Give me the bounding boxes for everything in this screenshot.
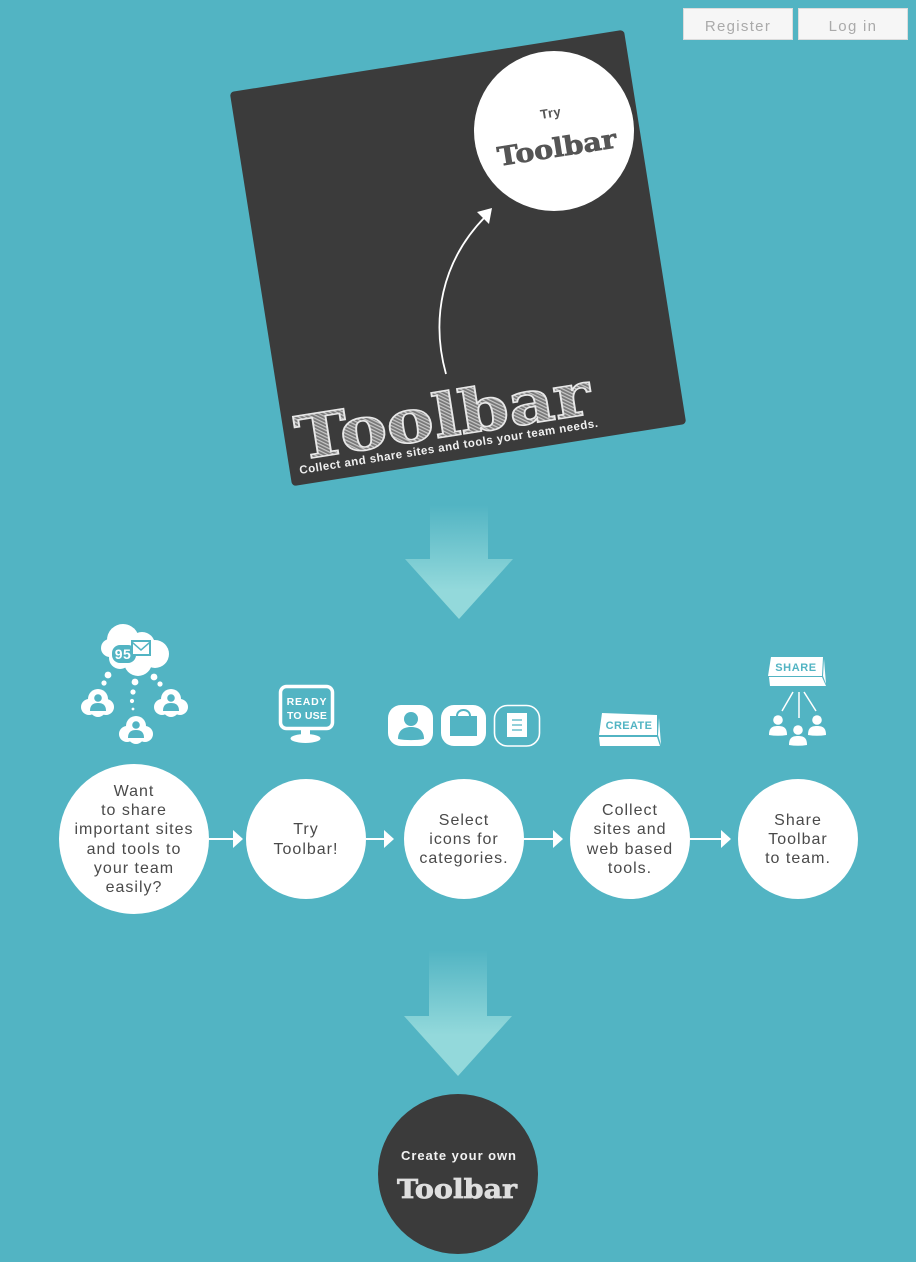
- button: log in: Log in: [829, 18, 877, 35]
- step 1 circle: your team: [94, 860, 174, 877]
- arrow: step 3 to 4: [524, 830, 563, 848]
- step 4 circle: sites and: [593, 821, 667, 838]
- icon: monitor ready to use: [280, 686, 332, 743]
- icon: share key with team: [768, 657, 826, 746]
- step 1 circle: to share: [101, 802, 167, 819]
- step 1 circle: easily?: [106, 879, 162, 896]
- icon: cloud network: [81, 624, 188, 744]
- small cloud right: [154, 689, 188, 717]
- call to action circle: [378, 1094, 538, 1254]
- icon: person tile: [388, 705, 433, 746]
- connector lines: [782, 692, 816, 718]
- step 1 circle: Want: [114, 783, 154, 800]
- try toolbar circle: Toolbar: [495, 124, 619, 173]
- button: register: Register: [705, 18, 771, 35]
- button: register: [684, 8, 792, 40]
- team people: [769, 715, 826, 746]
- card background: [230, 30, 686, 486]
- try toolbar circle: [474, 51, 634, 211]
- call to action circle: Toolbar: [397, 1175, 517, 1205]
- icon: create key: CREATE: [606, 720, 652, 732]
- step 1 circle: and tools to: [87, 841, 181, 858]
- big cloud: 95: [115, 646, 131, 662]
- toolbar title sketch: Toolbar: [290, 359, 597, 475]
- arrow: down one: [405, 505, 513, 619]
- icon: document tile: [494, 706, 540, 746]
- arrow: step 4 to 5: [690, 830, 731, 848]
- step 4 circle: tools.: [608, 860, 652, 877]
- dots: [101, 672, 163, 710]
- try toolbar circle: Try: [539, 104, 562, 122]
- share key: SHARE: [775, 662, 817, 674]
- tagline: Collect and share sites and tools your team needs.: [299, 418, 599, 477]
- call to action circle: Create your own: [401, 1148, 516, 1163]
- icon: monitor ready to use: READY: [287, 696, 327, 708]
- step 3 circle: categories.: [419, 850, 509, 867]
- button: log in: [798, 8, 908, 40]
- step 3 circle: icons for: [429, 831, 499, 848]
- step 3 circle: Select: [439, 812, 489, 829]
- icon: monitor ready to use: TO USE: [287, 710, 327, 722]
- arrow: step 1 to 2: [209, 830, 243, 848]
- step 4 circle: [570, 779, 690, 899]
- step 1 circle: [59, 764, 209, 914]
- step 2 circle: Toolbar!: [274, 841, 338, 858]
- small cloud bottom: [119, 716, 153, 744]
- step 5 circle: [738, 779, 858, 899]
- step 1 circle: important sites: [74, 821, 194, 838]
- step 4 circle: Collect: [602, 802, 658, 819]
- icon: bag tile: [441, 705, 486, 746]
- step 5 circle: Share: [774, 812, 822, 829]
- step 5 circle: to team.: [765, 850, 831, 867]
- small cloud left: [81, 689, 114, 717]
- step 2 circle: Try: [293, 821, 319, 838]
- icon: create key: [599, 713, 661, 746]
- step 2 circle: [246, 779, 366, 899]
- step 3 circle: [404, 779, 524, 899]
- arrow: step 2 to 3: [366, 830, 394, 848]
- curved arrow: [439, 208, 492, 374]
- panel: hero card: [230, 30, 686, 486]
- step 5 circle: Toolbar: [768, 831, 828, 848]
- step 4 circle: web based: [586, 841, 673, 858]
- arrow: down two: [404, 950, 512, 1076]
